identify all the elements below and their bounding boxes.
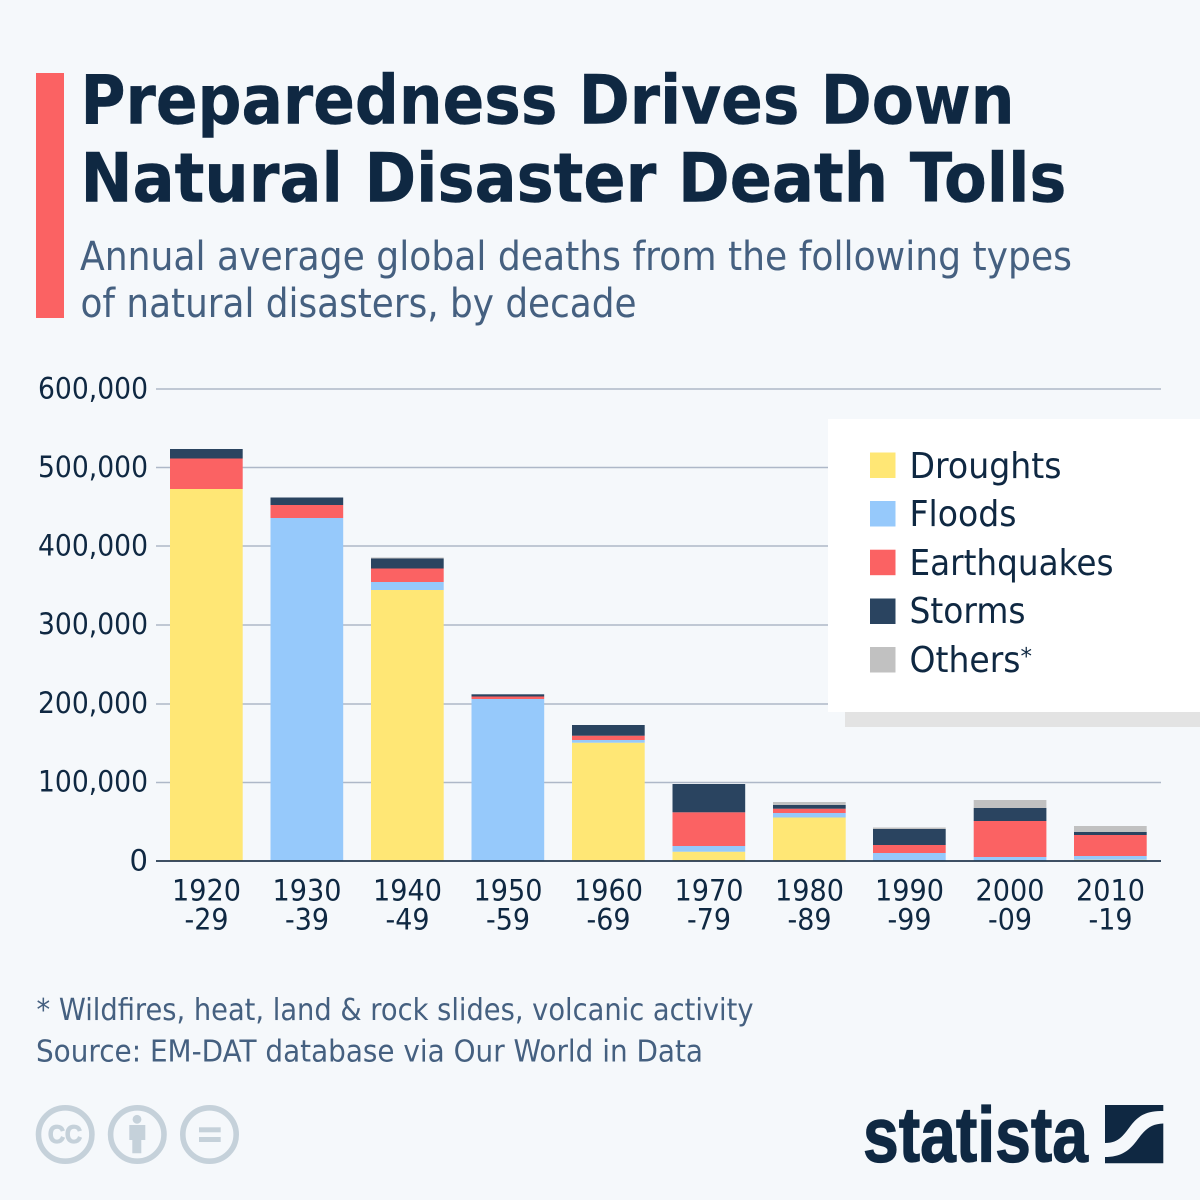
footnote and source: Source: EM-DAT database via Our World in Data (36, 1035, 703, 1070)
bar 2000-09 (974, 800, 1046, 861)
bar 1970-79 (672, 784, 745, 861)
statista wordmark: statista (863, 1091, 1089, 1179)
x axis labels: 1960 (574, 874, 643, 908)
x axis labels: 1940 (373, 874, 442, 908)
bar 1960-69 (572, 725, 645, 861)
y axis labels: 300,000 (38, 607, 148, 641)
x axis labels: -59 (486, 902, 530, 936)
footnote and source (36, 993, 754, 1070)
subtitle: Annual average global deaths from the following types (80, 234, 1072, 280)
bar 1990-99 (873, 828, 946, 861)
x axis labels: -39 (285, 902, 329, 936)
legend: floods: Floods (910, 494, 1016, 535)
x axis labels: 1990 (875, 874, 944, 908)
bar 1980-89 (773, 802, 846, 861)
accent bar (36, 73, 64, 318)
y axis labels: 500,000 (38, 450, 148, 484)
x axis labels: 2000 (976, 874, 1044, 908)
subtitle: of natural disasters, by decade (80, 281, 636, 327)
x axis labels: -89 (788, 902, 832, 936)
legend: storms: Storms (910, 591, 1026, 632)
footnote and source: * Wildfires, heat, land & rock slides, volcanic activity (36, 993, 754, 1028)
legend: earthquakes: Earthquakes (910, 543, 1114, 584)
x axis labels: -69 (586, 902, 630, 936)
y axis labels: 600,000 (38, 372, 148, 406)
y axis labels: 400,000 (38, 528, 148, 562)
legend: floods (870, 494, 1016, 535)
x axis labels: 1920 (172, 874, 241, 908)
x axis labels: 1950 (474, 874, 542, 908)
icon: creative commons (38, 1108, 92, 1161)
legend: others: Others (910, 640, 1020, 681)
bar 1950-59 (472, 694, 544, 861)
icon: attribution (111, 1108, 164, 1161)
subtitle (80, 234, 1072, 327)
legend panel (828, 419, 1200, 727)
bar 1940-49 (371, 558, 444, 861)
x axis labels (172, 874, 1145, 936)
y axis labels: 200,000 (38, 686, 148, 720)
statista logo mark (1105, 1105, 1163, 1163)
x axis labels: 1980 (775, 874, 844, 908)
x axis labels: 1970 (674, 874, 744, 908)
icon: no derivatives (183, 1108, 236, 1161)
legend: droughts: Droughts (910, 446, 1062, 487)
x axis labels: -99 (888, 902, 932, 936)
bar 1920-29 (170, 449, 243, 861)
x axis labels: -19 (1088, 902, 1132, 936)
legend: others: * (1020, 644, 1032, 670)
y axis labels: 100,000 (38, 764, 148, 798)
legend: storms (870, 591, 1026, 632)
title: Preparedness Drives Down (80, 62, 1014, 140)
x axis labels: 1930 (272, 874, 342, 908)
x axis labels: -49 (386, 902, 430, 936)
y axis labels (38, 372, 148, 878)
y axis labels: 0 (130, 844, 148, 878)
bar 1930-39 (270, 498, 343, 861)
x axis labels: -79 (687, 902, 731, 936)
bar 2010-19 (1074, 826, 1147, 861)
title: Natural Disaster Death Tolls (80, 140, 1066, 218)
title (80, 62, 1066, 218)
stacked bar chart (38, 372, 1161, 936)
icon: creative commons: CC (48, 1121, 82, 1149)
x axis labels: -09 (988, 902, 1032, 936)
x axis labels: 2010 (1076, 874, 1145, 908)
x axis labels: -29 (184, 902, 228, 936)
